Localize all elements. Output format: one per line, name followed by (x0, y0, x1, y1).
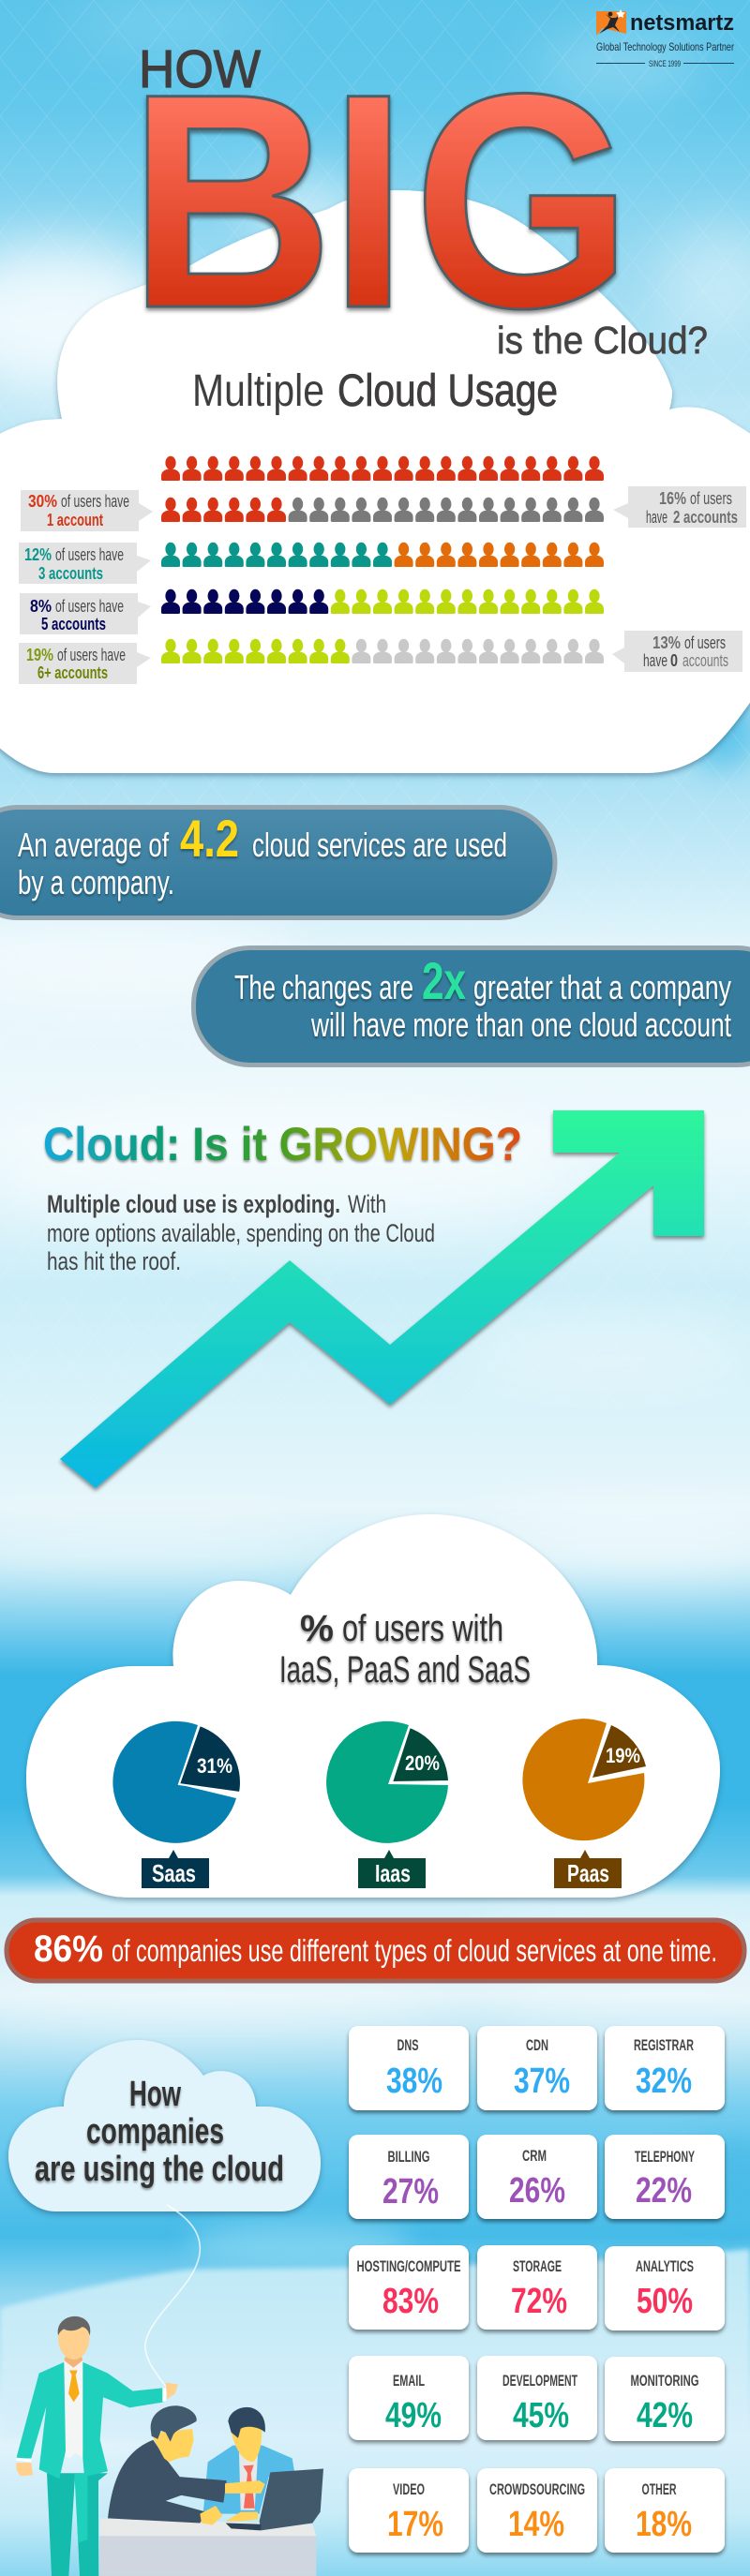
callout: 13% 0 accounts (612, 631, 742, 672)
callout: 19% 6+ accounts: 6+ accounts (38, 663, 108, 682)
card: BILLING: 27% (382, 2172, 439, 2211)
growth arrow (60, 1110, 704, 1488)
card: ANALYTICS: ANALYTICS (636, 2257, 694, 2275)
illustration: business people at laptop (16, 2316, 323, 2576)
title: BIG: B (128, 30, 334, 371)
callout: 13% 0 accounts: 0 (670, 651, 678, 670)
callout: 16% 2 accounts: have (646, 508, 668, 527)
stat pill: 4.2 cloud services: cloud services are used (252, 826, 507, 864)
heading: Cloud: Is it GROWING?: Cloud: Is it GROWING? (43, 1118, 522, 1170)
card: CROWDSOURCING: CROWDSOURCING (489, 2480, 585, 2498)
speech cloud: how companies are using the cloud: are using the cloud (35, 2150, 284, 2189)
card: DEVELOPMENT: DEVELOPMENT (502, 2372, 578, 2390)
label: Saas: Saas (152, 1859, 196, 1887)
callout: 8% 5 accounts: 5 accounts (41, 615, 106, 633)
card: OTHER: 18% (636, 2505, 692, 2544)
card: VIDEO: 17% (387, 2505, 443, 2544)
label: Paas (554, 1850, 622, 1888)
pie chart: Iaas 20%: 20% (405, 1751, 440, 1775)
title: BIG: G (413, 30, 632, 372)
heading: % of users with IaaS, PaaS and SaaS: IaaS, PaaS and SaaS (279, 1649, 531, 1690)
label: Saas (142, 1850, 209, 1888)
text block: multiple cloud use (47, 1190, 435, 1275)
text block: multiple cloud use: more options available, spending on the Cloud (47, 1219, 435, 1247)
card: CRM (477, 2135, 597, 2219)
callout: 16% 2 accounts: of users (690, 489, 732, 508)
speech cloud: how companies are using the cloud (8, 2040, 321, 2211)
laptop (226, 2468, 323, 2530)
speech cloud: how companies are using the cloud: How (129, 2075, 181, 2114)
callout: 8% 5 accounts (20, 593, 151, 634)
callout: 8% 5 accounts: 8% (30, 597, 52, 616)
heading: % of users with IaaS, PaaS and SaaS: % (300, 1608, 334, 1649)
callout: 12% 3 accounts: 3 accounts (38, 564, 103, 583)
seated man dark (108, 2405, 265, 2524)
stat pill: 2x more accounts (193, 948, 750, 1065)
callout: 13% 0 accounts: accounts (682, 651, 728, 670)
callout: 13% 0 accounts: have (643, 651, 668, 670)
card: CROWDSOURCING (477, 2468, 597, 2553)
row 3 (161, 543, 604, 567)
callout: 8% 5 accounts: of users have (55, 597, 124, 616)
speech line (145, 2205, 200, 2387)
card: BILLING: BILLING (388, 2148, 429, 2166)
card: TELEPHONY: 22% (636, 2171, 692, 2211)
row 5 (161, 639, 604, 663)
card: BILLING (349, 2135, 469, 2219)
stat pill: 2x more accounts: The changes are (234, 968, 413, 1006)
title (128, 30, 708, 372)
card: DEVELOPMENT: 45% (513, 2396, 569, 2435)
standing man (16, 2316, 178, 2576)
card: STORAGE: STORAGE (513, 2257, 562, 2275)
card: REGISTRAR: 32% (636, 2062, 692, 2101)
callout: 12% 3 accounts: of users have (55, 545, 124, 564)
pictogram: account usage rows (161, 456, 604, 663)
callout: 19% 6+ accounts: 19% (26, 646, 53, 664)
stat pill: 4.2 cloud services: An average of (18, 826, 170, 864)
card: EMAIL (349, 2356, 469, 2440)
pie chart: Iaas 20% (326, 1721, 449, 1843)
pie chart: Saas 31% (112, 1721, 241, 1843)
card: DNS: DNS (398, 2036, 418, 2054)
callout: 13% 0 accounts: 13% (652, 633, 681, 652)
logo wordmark: netsmartz (630, 10, 734, 36)
card: REGISTRAR: REGISTRAR (634, 2036, 694, 2054)
title: BIG: I (329, 30, 408, 371)
heading: Multiple Cloud Usage: Multiple (192, 366, 324, 416)
stat value: 4.2: 4.2 (180, 809, 239, 868)
card: CROWDSOURCING: 14% (508, 2505, 564, 2544)
row 2 (161, 498, 604, 522)
card: REGISTRAR (605, 2026, 725, 2110)
seated man blue (203, 2407, 295, 2522)
logo since line: SINCE 1999 (649, 59, 681, 68)
speech cloud: how companies are using the cloud: companies (86, 2112, 224, 2152)
white cloud panel: service models (26, 1514, 720, 1898)
callout: 19% 6+ accounts: of users have (57, 646, 126, 664)
callout: 19% 6+ accounts (19, 643, 151, 684)
card: CRM: CRM (522, 2147, 547, 2165)
card: HOSTING/COMPUTE: 83% (382, 2282, 439, 2321)
card: DNS (349, 2026, 469, 2110)
title: BIG (128, 30, 632, 372)
card: OTHER (605, 2468, 725, 2553)
heading: Multiple Cloud Usage: Cloud Usage (338, 366, 558, 416)
text block: multiple cloud use: Multiple cloud use is exploding. (47, 1190, 340, 1218)
card: VIDEO: VIDEO (393, 2480, 425, 2498)
card: MONITORING: MONITORING (630, 2372, 699, 2390)
card: DNS: 38% (386, 2062, 442, 2101)
card: HOSTING/COMPUTE (349, 2245, 469, 2330)
callout: 30% 1 account: 30% (28, 492, 57, 511)
stat pill: 4.2 cloud services: by a company. (18, 863, 174, 901)
callout: 30% 1 account: of users have (61, 492, 129, 511)
heading: Multiple Cloud Usage (192, 366, 558, 416)
card: ANALYTICS (605, 2246, 725, 2330)
stat pill: 86% of companies (7, 1920, 744, 1981)
heading: % of users with IaaS, PaaS and SaaS: of users with (342, 1608, 503, 1649)
card: STORAGE (477, 2245, 597, 2330)
callout: 30% 1 account (21, 490, 153, 531)
card: MONITORING: 42% (637, 2396, 693, 2435)
pie chart: Paas 19%: 19% (606, 1744, 640, 1767)
callout: 16% 2 accounts: 16% (659, 489, 686, 508)
card: HOSTING/COMPUTE: HOSTING/COMPUTE (356, 2257, 461, 2275)
card: VIDEO (349, 2468, 469, 2553)
row 4 (161, 589, 604, 614)
label: Iaas (358, 1850, 426, 1888)
pie chart: Saas 31%: 31% (197, 1754, 232, 1778)
stat pill: 86% of companies: 86% (34, 1928, 103, 1970)
card: CDN (477, 2026, 597, 2110)
card: CDN: CDN (526, 2036, 548, 2054)
text block: multiple cloud use: With (348, 1190, 386, 1218)
label: Iaas: Iaas (375, 1859, 411, 1887)
text block: multiple cloud use: has hit the roof. (47, 1247, 181, 1275)
card: OTHER: OTHER (641, 2480, 677, 2498)
label: Paas: Paas (567, 1859, 609, 1887)
callout: 30% 1 account: 1 account (47, 511, 103, 529)
logo: netsmartz (596, 9, 734, 68)
card: CRM: 26% (509, 2171, 565, 2211)
title: is the Cloud?: is the Cloud? (497, 319, 708, 362)
card: ANALYTICS: 50% (637, 2282, 693, 2321)
row 1 (161, 456, 604, 481)
card: CDN: 37% (514, 2062, 570, 2101)
stat pill: 4.2 cloud services (0, 808, 555, 918)
card: EMAIL: EMAIL (393, 2372, 425, 2390)
card: STORAGE: 72% (511, 2282, 567, 2321)
pie chart: Paas 19% (522, 1719, 646, 1840)
card: DEVELOPMENT (477, 2356, 597, 2440)
desk (99, 2518, 316, 2576)
callout: 12% 3 accounts (19, 543, 151, 584)
card: EMAIL: 49% (385, 2396, 442, 2435)
card: MONITORING (605, 2357, 725, 2441)
card: TELEPHONY (605, 2135, 725, 2219)
large white cloud panel (0, 190, 750, 773)
icon: orange logo mark (596, 9, 626, 36)
heading: % of users with IaaS, PaaS and SaaS (279, 1608, 531, 1690)
title: HOW: HOW (139, 39, 261, 99)
callout: 12% 3 accounts: 12% (24, 545, 52, 564)
callout: 13% 0 accounts: of users (684, 633, 726, 652)
stat value: 2x: 2x (422, 951, 466, 1010)
card: TELEPHONY: TELEPHONY (635, 2148, 695, 2166)
callout: 16% 2 accounts (613, 486, 746, 528)
